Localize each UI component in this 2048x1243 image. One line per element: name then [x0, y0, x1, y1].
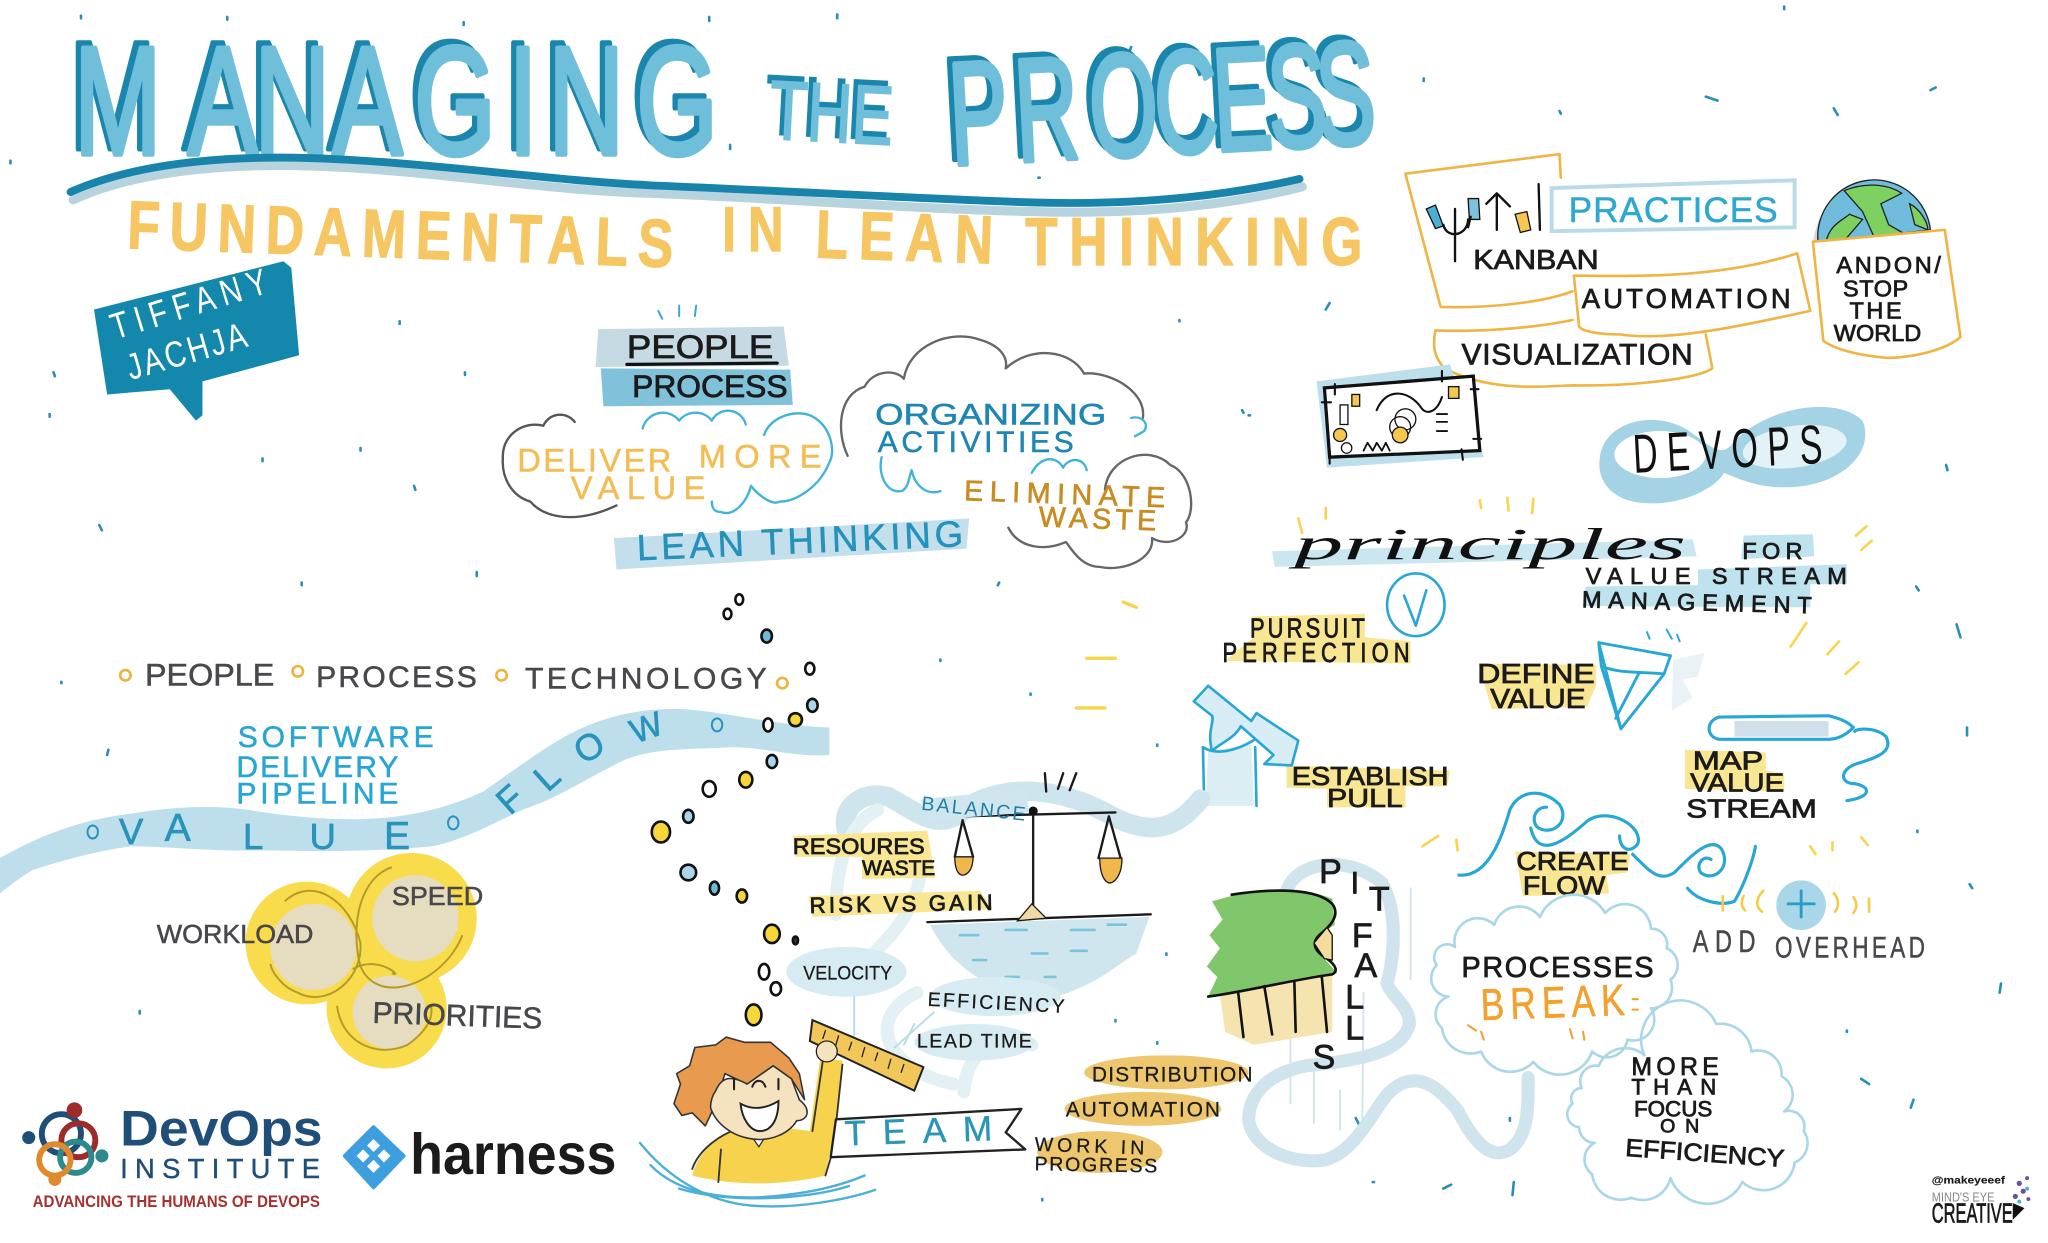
illustration: team character: TEAM: [844, 1109, 993, 1153]
heading: pitfalls letters: A: [1354, 947, 1377, 985]
text: software delivery pipeline: PIPELINE: [236, 777, 398, 810]
tags: distribution automation work in progress: [1034, 1055, 1253, 1177]
principle: map value stream: VALUE: [1690, 768, 1784, 798]
subtitle: Fundamentals in Lean Thinking: [126, 187, 1363, 282]
value flow band: L: [526, 755, 568, 799]
icon: globe with andon note: WORLD: [1834, 320, 1921, 346]
cloud: organizing activities: [841, 336, 1146, 492]
venn: workload speed priorities: SPEED: [392, 881, 483, 911]
cloud: deliver more value: VALUE: [571, 469, 705, 506]
principle: map value stream: [1685, 716, 1888, 824]
heading: pitfalls letters: F: [1352, 917, 1373, 955]
value flow band: O: [566, 722, 612, 772]
cloud: deliver more value: DELIVER: [517, 442, 671, 479]
speech bubble: Tiffany Jachja: TIFFANY: [106, 262, 272, 348]
value flow band: L: [243, 816, 263, 857]
icon: visualization diagram: [1317, 364, 1484, 468]
face: [711, 1066, 807, 1139]
principle: map value stream: MAP: [1693, 745, 1763, 775]
labels around scale: WASTE: [862, 857, 935, 880]
icon: kanban board: [1426, 184, 1540, 261]
metrics: velocity efficiency lead time: VELOCITY: [803, 963, 892, 985]
body sweater: [692, 1058, 842, 1183]
cloud: eliminate waste: ELIMINATE: [964, 475, 1166, 514]
logo: DevOps Institute: DevOps: [120, 1100, 323, 1156]
text: software delivery pipeline: [236, 721, 434, 810]
cloud: deliver more value: [503, 411, 832, 517]
cloud: more than focus on efficiency: ON: [1660, 1115, 1699, 1137]
cloud: more than focus on efficiency: [1567, 1000, 1808, 1204]
cloud: more than focus on efficiency: FOCUS: [1634, 1097, 1712, 1122]
panel: people process: PROCESS: [632, 369, 788, 404]
title: Managing the Process: [69, 6, 1379, 196]
heading: principles for value stream management: FOR: [1742, 538, 1802, 564]
heading: pitfalls letters: I: [1351, 865, 1359, 900]
heading: principles for value stream management: [1272, 519, 1847, 618]
subtitle: Fundamentals in Lean Thinking: IN: [722, 194, 783, 264]
heading: pitfalls letters: L: [1345, 1010, 1364, 1048]
text: people process technology: PROCESS: [316, 661, 477, 694]
panel: practices: PRACTICES: [1569, 191, 1778, 230]
title: Managing the Process: MANAGING: [69, 10, 713, 182]
value flow band: W: [625, 705, 668, 751]
metrics: velocity efficiency lead time: [786, 947, 1065, 1061]
title: Managing the Process: PROCESS: [940, 6, 1374, 191]
principle: map value stream: STREAM: [1686, 794, 1817, 824]
panel: practices: KANBAN: [1473, 244, 1599, 275]
heading: pitfalls letters: S: [1313, 1038, 1335, 1076]
cloud: organizing activities: ACTIVITIES: [878, 426, 1074, 459]
banner: [831, 1109, 1025, 1157]
labels around scale: RESOURES: [793, 834, 925, 859]
principle: establish pull: PULL: [1327, 783, 1403, 813]
heading: pitfalls letters: L: [1345, 978, 1364, 1016]
panel: people process: [596, 306, 793, 406]
value flow band: E: [384, 815, 410, 858]
value flow band: V: [119, 811, 144, 852]
river: pale blue flow: [836, 791, 1528, 1161]
text: software delivery pipeline: SOFTWARE: [238, 721, 434, 754]
subtitle: Fundamentals in Lean Thinking: LEAN: [815, 196, 994, 278]
icon: globe with andon note: ANDON/: [1836, 252, 1941, 278]
cloud: deliver more value: MORE: [699, 438, 822, 475]
logo: harness: harness: [410, 1123, 616, 1187]
heading: principles for value stream management: VALUE STREAM: [1586, 563, 1847, 589]
principle: define value: [1477, 630, 1704, 729]
logo: DevOps Institute: ADVANCING THE HUMANS OF DEVOPS: [33, 1193, 320, 1211]
title underline: [71, 158, 1302, 212]
heading: principles for value stream management: principles: [1288, 519, 1686, 569]
icon: globe with andon note: [1813, 180, 1960, 358]
cloud: eliminate waste: [964, 455, 1191, 568]
title: Managing the Process: THE: [767, 63, 896, 163]
illustration: balance scale: [927, 773, 1151, 995]
value flow band: U: [310, 816, 336, 857]
cloud: processes break: [1431, 895, 1678, 1075]
heading: pitfalls letters: P: [1319, 853, 1342, 891]
labels around scale: RISK VS GAIN: [809, 890, 993, 918]
callout: add overhead: ADD: [1693, 924, 1755, 959]
subtitle: Fundamentals in Lean Thinking: THINKING: [1025, 204, 1363, 280]
logo: mind's eye creative: MIND'S EYE: [1932, 1190, 1995, 1205]
principle: create flow: [1459, 793, 1755, 903]
logo: mind's eye creative: [1932, 1175, 2030, 1229]
text: software delivery pipeline: DELIVERY: [236, 751, 398, 784]
devops infinity: [1599, 407, 1865, 503]
hair: [674, 1037, 805, 1126]
callout: add overhead: OVERHEAD: [1775, 930, 1925, 964]
speech bubble: Tiffany Jachja: [94, 261, 299, 421]
tags: distribution automation work in progress: AUTOMATION: [1066, 1099, 1220, 1122]
value flow band: F: [488, 777, 532, 822]
venn: workload speed priorities: [157, 853, 543, 1068]
logo: DevOps Institute: [22, 1100, 323, 1211]
value flow band: A: [165, 807, 192, 850]
callout: add overhead: [1693, 880, 1925, 964]
text: people process technology: [120, 658, 788, 695]
title: Managing the Process: MANAGING: [74, 15, 718, 187]
panel: practices: VISUALIZATION: [1462, 338, 1693, 371]
title: Managing the Process: THE: [763, 57, 892, 158]
tags: distribution automation work in progress: DISTRIBUTION: [1092, 1063, 1253, 1086]
principle: establish pull: [1194, 686, 1450, 813]
venn: workload speed priorities: WORKLOAD: [157, 919, 313, 949]
principle: define value: VALUE: [1490, 683, 1586, 714]
water lines: [640, 1143, 875, 1206]
ruler: [810, 1020, 923, 1091]
thought bubble dots: [652, 594, 818, 1025]
tags: distribution automation work in progress: PROGRESS: [1034, 1153, 1158, 1177]
devops infinity: DEVOPS: [1631, 414, 1824, 485]
panel: practices: [1405, 154, 1810, 387]
cloud: more than focus on efficiency: EFFICIENCY: [1624, 1135, 1785, 1173]
venn: workload speed priorities: PRIORITIES: [372, 997, 543, 1036]
principle: pursuit perfection: PURSUIT: [1250, 614, 1365, 644]
icon: globe with andon note: STOP: [1843, 275, 1908, 301]
principle: create flow: FLOW: [1523, 871, 1606, 901]
cloud: processes break: BREAK: [1480, 975, 1626, 1030]
cloud: organizing activities: ORGANIZING: [875, 398, 1106, 431]
tags: distribution automation work in progress: WORK IN: [1034, 1134, 1145, 1160]
metrics: velocity efficiency lead time: EFFICIENCY: [927, 989, 1065, 1018]
panel: practices: AUTOMATION: [1582, 283, 1791, 314]
cloud: more than focus on efficiency: MORE: [1631, 1054, 1719, 1081]
icon: globe with andon note: THE: [1849, 298, 1902, 324]
principle: define value: DEFINE: [1477, 658, 1595, 689]
principle: pursuit perfection: [1223, 573, 1445, 669]
banner: lean thinking: LEAN THINKING: [636, 513, 964, 568]
labels around scale: [793, 789, 1029, 918]
illustration: pitfalls cliff: [1207, 890, 1337, 1045]
text: people process technology: TECHNOLOGY: [525, 662, 767, 695]
cloud: more than focus on efficiency: THAN: [1631, 1075, 1716, 1100]
icon: linked people rings: [22, 1102, 108, 1186]
title: Managing the Process: PROCESS: [945, 11, 1379, 196]
text: people process technology: PEOPLE: [145, 658, 274, 693]
logo: mind's eye creative: @makeyeeef: [1932, 1175, 2005, 1186]
principle: create flow: CREATE: [1516, 846, 1629, 876]
panel: people process: PEOPLE: [627, 328, 773, 365]
principle: pursuit perfection: PERFECTION: [1223, 639, 1410, 669]
subtitle: Fundamentals in Lean Thinking: FUNDAMENTALS: [126, 187, 675, 282]
heading: principles for value stream management: MANAGEMENT: [1582, 586, 1812, 618]
value flow band: [0, 705, 829, 893]
principle: establish pull: ESTABLISH: [1292, 761, 1448, 791]
illustration: team character: [640, 1020, 1025, 1206]
heading: pitfalls letters: T: [1369, 880, 1390, 918]
speech bubble: Tiffany Jachja: JACHJA: [122, 315, 252, 389]
yellow accent ticks: [1076, 498, 1872, 854]
cloud: eliminate waste: WASTE: [1038, 501, 1157, 537]
metrics: velocity efficiency lead time: LEAD TIME: [917, 1031, 1032, 1053]
heading: pitfalls letters: [1313, 853, 1390, 1076]
cloud: processes break: PROCESSES: [1462, 952, 1654, 984]
logo: DevOps Institute: INSTITUTE: [120, 1153, 320, 1184]
labels around scale: BALANCE: [920, 793, 1027, 826]
